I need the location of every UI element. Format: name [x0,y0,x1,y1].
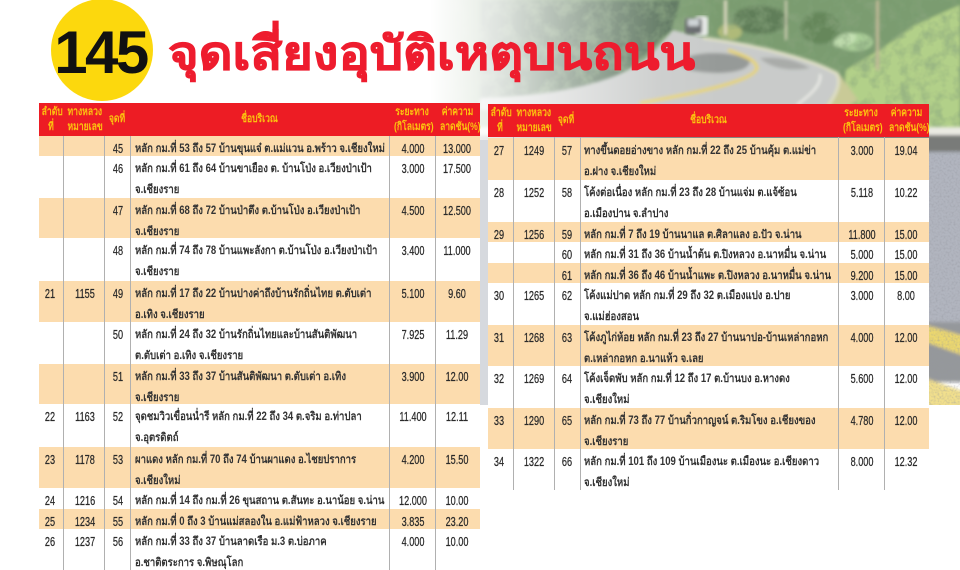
row 59: 15.00 [895,228,917,242]
row 58: 5.118 [851,186,873,200]
right table header: (กิโลเมตร) [843,122,883,134]
row 51 [39,364,480,404]
left table header: จุดที่ [109,113,125,125]
row 61: 15.00 [895,269,917,283]
left table header: ค่าความ [442,106,473,118]
row 57: อ.ฝาง จ.เชียงใหม่ [584,166,656,178]
row 60: 60 [562,248,572,262]
row 56: 1237 [75,535,95,549]
row 51: 51 [113,370,123,384]
row 65: 33 [494,414,504,428]
row 64: 12.00 [895,372,917,386]
row 53: 53 [113,453,123,467]
row 55: 55 [113,515,123,529]
left table header: ทางหลวง [68,106,102,118]
row 53: จ.เชียงใหม่ [135,475,180,487]
row 46: 3.000 [402,162,424,176]
row 51: 12.00 [446,370,468,384]
row 66: จ.เชียงใหม่ [584,477,629,489]
row 55: หลัก กม.ที่ 0 ถึง 3 บ้านแม่สลองใน อ.แม่ฟ้าหลวง จ.เชียงราย [135,516,377,528]
row 66: 66 [562,455,572,469]
row 64 [488,366,929,408]
row 47: หลัก กม.ที่ 68 ถึง 72 บ้านป่าตึง ต.บ้านโป่ง อ.เวียงป่าเป้า [135,205,360,217]
left table header: หมายเลข [68,121,103,133]
row 56: หลัก กม.ที่ 33 ถึง 37 บ้านลาดเรือ ม.3 ต.บ่อภาค [135,536,327,548]
row 62: โค้งแม่ปาด หลัก กม.ที่ 29 ถึง 32 ต.เมืองแปง อ.ปาย [584,290,790,302]
row 53: ผาแดง หลัก กม.ที่ 70 ถึง 74 บ้านผาแดง อ.ไชยปราการ [135,454,356,466]
row 62: 8.00 [897,289,915,303]
row 57: 57 [562,144,572,158]
left table header: ลาดชัน(%) [440,121,481,133]
row 45: 13.000 [443,142,471,156]
right table header: ค่าความ [891,107,922,119]
row 51: จ.เชียงราย [135,392,179,404]
row 52: จุดชมวิวเขื่อนน่ำรี หลัก กม.ที่ 22 ถึง 34 ต.จริม อ.ท่าปลา [135,411,362,423]
row 66: หลัก กม.ที่ 101 ถึง 109 บ้านเมืองนะ ต.เมืองนะ อ.เชียงดาว [584,456,819,468]
right table header: ที่ [497,122,503,134]
row 53: 23 [45,453,55,467]
row 48: 3.400 [402,244,424,258]
row 46: 17.500 [443,162,471,176]
right table header: ชื่อบริเวณ [690,114,727,126]
row 52 [39,404,480,447]
row 64: 64 [562,372,572,386]
row 59: 29 [494,228,504,242]
row 50: ต.ตับเต่า อ.เทิง จ.เชียงราย [135,350,243,362]
row 47: จ.เชียงราย [135,226,179,238]
badge: yellow circle with number 145 [51,0,153,101]
row 53: 4.200 [402,453,424,467]
row 57: 3.000 [851,144,873,158]
row 66 [488,449,929,490]
row 58: 1252 [524,186,544,200]
row 59 [488,222,929,242]
row 56: 4.000 [402,535,424,549]
row 45: 45 [113,142,123,156]
left table header: ที่ [48,121,54,133]
right table header: ระยะทาง [844,107,878,119]
row 54: 10.00 [446,494,468,508]
row 49: 49 [113,287,123,301]
row 65: หลัก กม.ที่ 73 ถึง 77 บ้านกิ่วกาญจน์ ต.ริมโขง อ.เชียงของ [584,415,816,427]
row 60 [488,242,929,263]
row 46: จ.เชียงราย [135,184,179,196]
row 61: 61 [562,269,572,283]
row 49 [39,281,480,322]
row 52: 11.400 [399,410,427,424]
row 52: จ.อุตรดิตถ์ [135,432,178,444]
row 54: 1216 [75,494,95,508]
row 52: 22 [45,410,55,424]
row 66: 8.000 [851,455,873,469]
row 49: 21 [45,287,55,301]
row 53: 15.50 [446,453,468,467]
row 56 [39,529,480,570]
row 64: 1269 [524,372,544,386]
row 62 [488,283,929,325]
row 58: 58 [562,186,572,200]
row 53: 1178 [75,453,95,467]
row 49: หลัก กม.ที่ 17 ถึง 22 บ้านปางค่าถึงบ้านรักถิ่นไทย ต.ตับเต่า [135,288,371,300]
left table header [39,103,480,136]
row 54: 24 [45,494,55,508]
row 47: 12.500 [443,204,471,218]
row 57: 1249 [524,144,544,158]
row 64: โค้งเจ็ดพับ หลัก กม.ที่ 12 ถึง 17 ต.บ้านบง อ.หางดง [584,373,790,385]
row 48: 48 [113,244,123,258]
left table header: ชื่อบริเวณ [241,113,278,125]
row 66: 1322 [524,455,544,469]
row 51: หลัก กม.ที่ 33 ถึง 37 บ้านสันติพัฒนา ต.ตับเต่า อ.เทิง [135,371,346,383]
row 58: โค้งต่อเนื่อง หลัก กม.ที่ 23 ถึง 28 บ้านแจ่ม ต.แจ้ซ้อน [584,187,797,199]
row 59: 1256 [524,228,544,242]
row 55: 1234 [75,515,95,529]
row 48: จ.เชียงราย [135,266,179,278]
row 65: 1290 [524,414,544,428]
row 47: 47 [113,204,123,218]
row 62: 3.000 [851,289,873,303]
row 47 [39,198,480,238]
row 45: หลัก กม.ที่ 53 ถึง 57 บ้านขุนแจ๋ ต.แม่แวน อ.พร้าว จ.เชียงใหม่ [135,143,385,155]
right table header: ลาดชัน(%) [889,122,930,134]
row 62: จ.แม่ฮ่องสอน [584,311,639,323]
row 59: 59 [562,228,572,242]
row 46 [39,156,480,198]
row 58: อ.เมืองปาน จ.ลำปาง [584,208,668,220]
left table header: (กิโลเมตร) [394,121,434,133]
row 63: 1268 [524,331,544,345]
row 65: 12.00 [895,414,917,428]
row 59: หลัก กม.ที่ 7 ถึง 19 บ้านนาแล ต.ศิลาแลง อ.ปัว จ.น่าน [584,229,802,241]
row 60: หลัก กม.ที่ 31 ถึง 36 บ้านน้ำต้น ต.ปิงหลวง อ.นาหมื่น จ.น่าน [584,249,826,261]
row 58 [488,180,929,222]
row 56: 56 [113,535,123,549]
row 64: 5.600 [851,372,873,386]
row 63 [488,325,929,366]
row 46: หลัก กม.ที่ 61 ถึง 64 บ้านขาเยือง ต. บ้านโป่ง อ.เวียงป่าเป้า [135,163,372,175]
row 64: 32 [494,372,504,386]
row 55 [39,509,480,529]
row 56: อ.ชาติตระการ จ.พิษณุโลก [135,557,243,569]
row 52: 12.11 [446,410,468,424]
row 52: 1163 [75,410,95,424]
row 63: 63 [562,331,572,345]
right table header [488,104,929,137]
row 45: 4.000 [402,142,424,156]
row 66: 34 [494,455,504,469]
row 49: 5.100 [402,287,424,301]
row 57: 19.04 [895,144,917,158]
row 56: 10.00 [446,535,468,549]
title: จุดเสี่ยงอุบัติเหตุบนถนน [168,27,695,79]
right table header: ทางหลวง [517,107,551,119]
row 48 [39,238,480,281]
row 65: 4.780 [851,414,873,428]
row 63: โค้งภูไก่ห้อย หลัก กม.ที่ 23 ถึง 27 บ้านนาปอ-บ้านเหล่ากอหก [584,332,828,344]
row 65 [488,408,929,449]
row 62: 30 [494,289,504,303]
row 58: 10.22 [895,186,917,200]
right table header: จุดที่ [558,114,574,126]
right table header: ลำดับ [491,107,512,119]
row 62: 62 [562,289,572,303]
row 50: 7.925 [402,328,424,342]
row 55: 23.20 [446,515,468,529]
row 61 [488,263,929,283]
row 66: 12.32 [895,455,917,469]
row 55: 3.835 [402,515,424,529]
row 47: 4.500 [402,204,424,218]
row 56: 26 [45,535,55,549]
row 54: 54 [113,494,123,508]
right table header: หมายเลข [517,122,552,134]
row 50: 50 [113,328,123,342]
row 50: หลัก กม.ที่ 24 ถึง 32 บ้านรักถิ่นไทยและบ้านสันติพัฒนา [135,329,357,341]
badge: yellow circle with number 145: 145 [54,19,147,86]
panel: right table [488,104,930,490]
left table header: ลำดับ [42,106,63,118]
row 57: ทางขึ้นดอยอ่างขาง หลัก กม.ที่ 22 ถึง 25 บ้านคุ้ม ต.แม่ข่า [584,145,816,157]
row 50 [39,322,480,364]
row 57: 27 [494,144,504,158]
row 65: จ.เชียงราย [584,436,628,448]
row 60: 15.00 [895,248,917,262]
row 51: 3.900 [402,370,424,384]
row 63: 31 [494,331,504,345]
panel: left table [39,103,481,570]
left table header: ระยะทาง [395,106,429,118]
row 53 [39,447,480,488]
row 50: 11.29 [446,328,468,342]
row 65: 65 [562,414,572,428]
row 57 [488,138,929,180]
row 49: อ.เทิง จ.เชียงราย [135,309,205,321]
row 46: 46 [113,162,123,176]
row 64: จ.เชียงใหม่ [584,394,629,406]
row 48: หลัก กม.ที่ 74 ถึง 78 บ้านแพะลังกา ต.บ้านโป่ง อ.เวียงป่าเป้า [135,245,377,257]
row 48: 11.000 [443,244,471,258]
row 45 [39,136,480,156]
row 62: 1265 [524,289,544,303]
row 52: 52 [113,410,123,424]
row 63: ต.เหล่ากอหก อ.นาแห้ว จ.เลย [584,353,704,365]
row 60: 5.000 [851,248,873,262]
row 63: 4.000 [851,331,873,345]
row 61: หลัก กม.ที่ 36 ถึง 46 บ้านน้ำแพะ ต.ปิงหลวง อ.นาหมื่น จ.น่าน [584,270,831,282]
row 58: 28 [494,186,504,200]
row 49: 1155 [75,287,95,301]
row 54: 12.000 [399,494,427,508]
row 59: 11.800 [848,228,876,242]
row 49: 9.60 [448,287,466,301]
row 54 [39,488,480,509]
row 55: 25 [45,515,55,529]
row 63: 12.00 [895,331,917,345]
row 61: 9.200 [851,269,873,283]
row 54: หลัก กม.ที่ 14 ถึง กม.ที่ 26 ขุนสถาน ต.สันทะ อ.นาน้อย จ.น่าน [135,495,384,507]
